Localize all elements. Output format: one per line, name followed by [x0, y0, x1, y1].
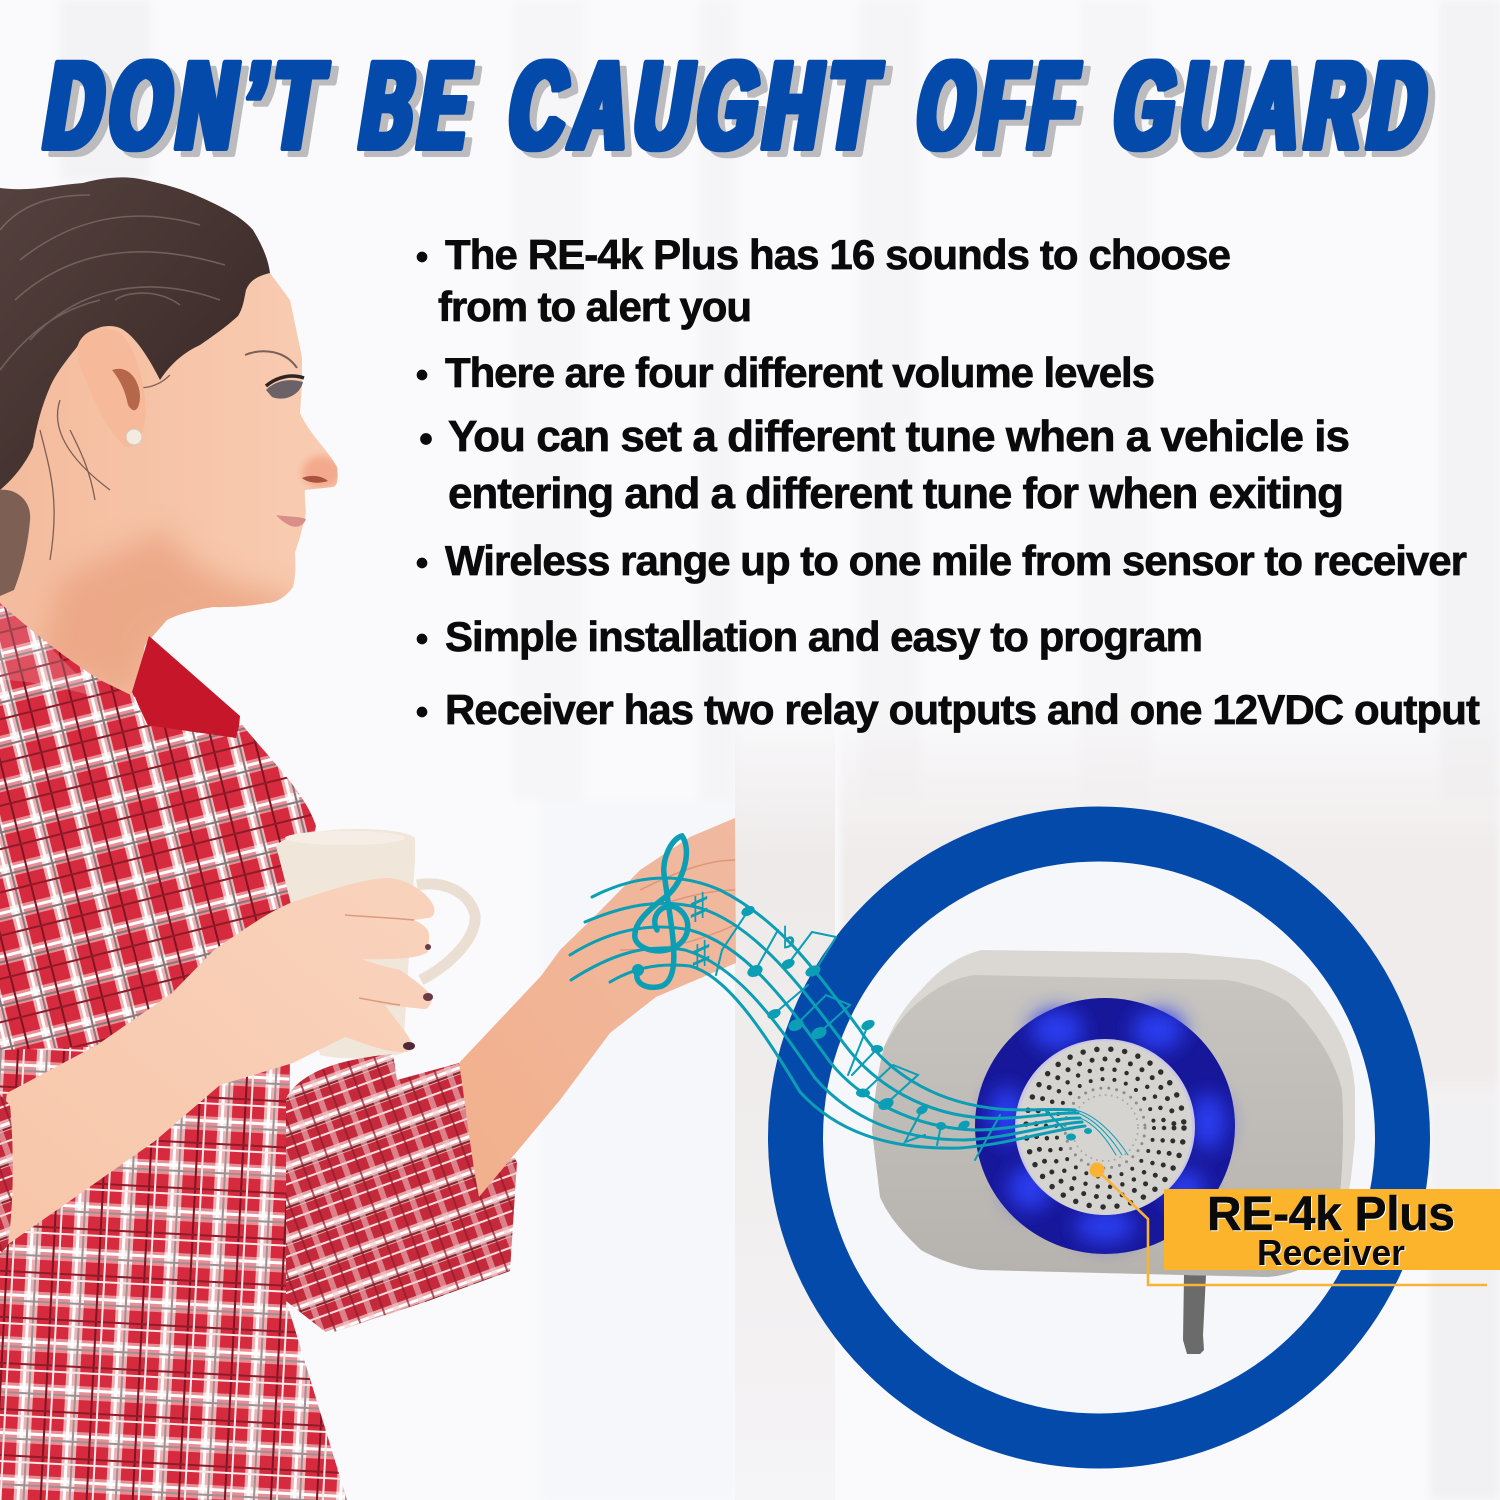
- heading: Don't be caught off guard: BE: [353, 37, 487, 175]
- heading: Don't be caught off guard: OFF: [909, 37, 1094, 175]
- shirt body: [0, 603, 345, 1500]
- product label: RE-4k Plus: [1207, 1188, 1455, 1241]
- bullet 1: [417, 231, 1231, 330]
- music staff flowing from hand to receiver: [570, 836, 1128, 1160]
- sharps and flats: ♯: [690, 885, 708, 926]
- receiver front face: [872, 975, 1343, 1277]
- earring: [126, 429, 142, 445]
- bullet 3: You can set a different tune when a vehicle is: [448, 412, 1350, 461]
- right forearm and hand: [459, 818, 736, 1197]
- product label: Receiver: [1257, 1232, 1405, 1273]
- lips: [276, 515, 306, 527]
- feature list: [417, 231, 1480, 733]
- shirt lower panel: [0, 1040, 347, 1500]
- nostril: [302, 476, 328, 483]
- hair: [0, 177, 270, 596]
- thin trailing lines: [1075, 1110, 1128, 1155]
- treble clef: [635, 836, 688, 987]
- collar fold shading: [0, 603, 98, 697]
- heading: Don't be caught off guard: [37, 37, 1445, 175]
- heading: Don't be caught off guard: DON’T: [37, 37, 341, 175]
- staff lines: [570, 878, 1085, 1148]
- left forearm and hand: [2, 878, 435, 1245]
- product label: [1164, 1188, 1500, 1273]
- left cuff: [0, 1095, 13, 1255]
- blue circle frame: [796, 834, 1402, 1441]
- heading: Don't be caught off guard: CAUGHT: [501, 37, 895, 175]
- bullet 6: Receiver has two relay outputs and one 12VDC output: [445, 686, 1480, 733]
- nose tint: [302, 456, 342, 488]
- red inner collar: [132, 636, 240, 760]
- speaker grille: [1018, 1041, 1192, 1215]
- bullet 1: from to alert you: [438, 283, 752, 330]
- sharps and flats: ♯: [692, 933, 710, 974]
- note heads and stems: [632, 904, 1092, 1140]
- blue LED ring: [975, 998, 1235, 1254]
- sharps and flats: ♭: [782, 922, 796, 955]
- power cable: [1183, 1275, 1206, 1354]
- callout leader line from speaker to label: [1090, 1162, 1487, 1285]
- device: RE-4k Plus receiver: [872, 950, 1355, 1354]
- receiver housing: [872, 950, 1355, 1277]
- jaw and neck shading: [40, 530, 300, 700]
- rolled right sleeve: [286, 1054, 517, 1334]
- bullet 5: Simple installation and easy to program: [445, 613, 1203, 660]
- bullet 2: There are four different volume levels: [445, 349, 1155, 396]
- sharps and flats: [690, 885, 796, 974]
- bullet 1: The RE-4k Plus has 16 sounds to choose: [445, 231, 1231, 278]
- bullet 3: entering and a different tune for when exiting: [448, 469, 1344, 518]
- bullet 4: Wireless range up to one mile from sensor to receiver: [445, 537, 1467, 584]
- bullet 3: [420, 412, 1350, 518]
- nails: [423, 993, 433, 1001]
- neck and face: [0, 273, 338, 697]
- photo: woman holding a mug beside the curtain: [0, 177, 736, 1500]
- mug: [276, 829, 475, 1059]
- eye and brow: [245, 351, 304, 399]
- ear: [78, 328, 146, 448]
